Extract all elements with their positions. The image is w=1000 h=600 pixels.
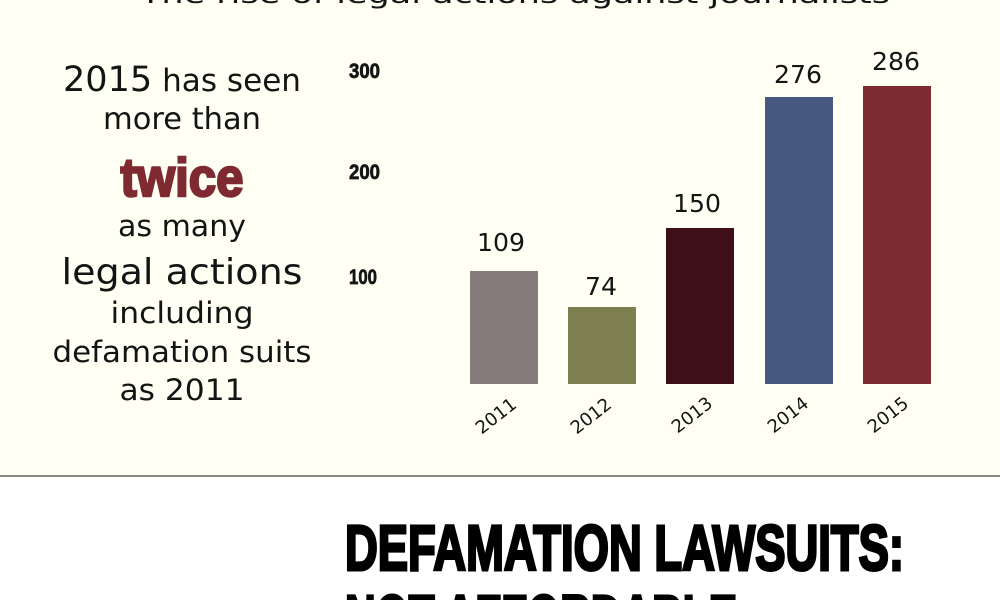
bar 2014: 2014: [764, 393, 813, 438]
bar 2011: 2011: [472, 394, 521, 439]
text block: key finding: [52, 60, 312, 407]
bar 2012: 2012: [567, 394, 616, 439]
text block: key finding: 2015 has seen: [63, 60, 301, 100]
text block: key finding: including: [110, 296, 254, 330]
text block: key finding: defamation suits: [52, 335, 312, 369]
bar 2015: [863, 47, 931, 438]
bar 2012: [567, 272, 636, 439]
bar 2012: 74: [585, 272, 617, 301]
y axis labels: 300: [349, 60, 380, 83]
panel: cream chart background: [0, 0, 1000, 475]
bar 2015: 286: [872, 47, 920, 76]
bar 2014: [764, 60, 833, 438]
y axis labels: 200: [349, 161, 380, 184]
text block: key finding: more than: [103, 102, 261, 137]
text block: key finding: as many: [118, 209, 246, 243]
y axis labels: 100: [349, 266, 377, 289]
bar 2011: [470, 228, 538, 439]
text block: key finding: legal actions: [62, 252, 302, 293]
bar 2015: 2015: [864, 393, 913, 438]
text block: key finding: as 2011: [120, 373, 244, 407]
bar 2013: [666, 189, 734, 438]
bar 2013: 150: [673, 189, 721, 218]
bar 2014: 276: [774, 60, 822, 89]
bar 2011: 109: [477, 228, 525, 257]
y axis labels: [349, 60, 380, 289]
bar chart: legal actions per year: [349, 47, 931, 439]
panel bottom border: [0, 475, 1000, 477]
text block: key finding: twice: [120, 148, 244, 208]
bar 2013: 2013: [668, 393, 717, 438]
